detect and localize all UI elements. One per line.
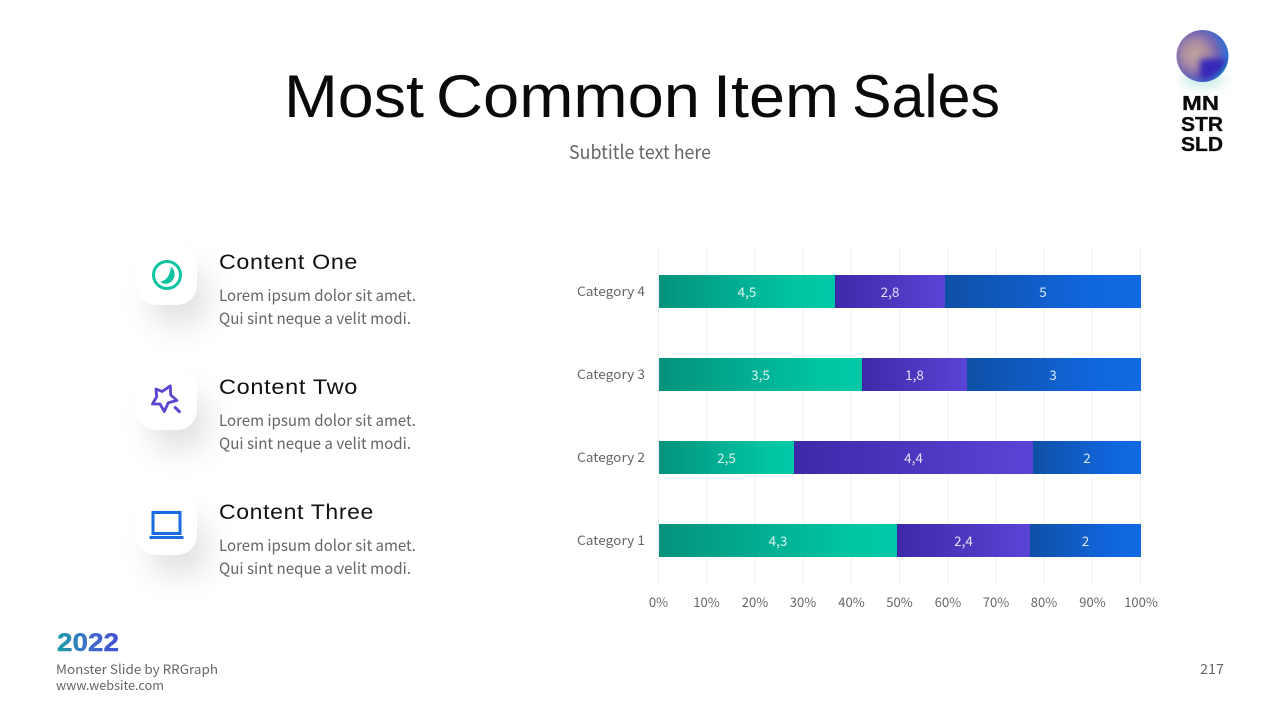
text block: Qui sint neque a velit modi. xyxy=(219,432,411,454)
bar: category 4: 2,8 xyxy=(881,281,899,301)
x axis labels: 80% xyxy=(1031,592,1057,611)
bar: category 1 xyxy=(577,524,1141,557)
bar: category 4: 4,5 xyxy=(738,281,756,301)
logo wordmark: SLD xyxy=(1181,134,1223,156)
page number: 217 xyxy=(1200,659,1224,679)
bar: category 3: 3,5 xyxy=(751,364,770,384)
title: Most xyxy=(284,63,424,130)
bar: category 2: 2,5 xyxy=(717,447,736,467)
panel: content two xyxy=(136,369,416,454)
footer: year: 2022 xyxy=(57,629,119,657)
text block xyxy=(219,409,416,454)
bar: category 2: 2 xyxy=(1083,447,1091,467)
x axis labels: 20% xyxy=(742,592,768,611)
text block: Lorem ipsum dolor sit amet. xyxy=(219,284,416,306)
bar: category 4: 5 xyxy=(1039,281,1047,301)
title xyxy=(284,63,1000,130)
bar: category 3: 1,8 xyxy=(905,364,924,384)
text block: Qui sint neque a velit modi. xyxy=(219,557,411,579)
bar: category 3: Category 3 xyxy=(577,364,645,383)
subtitle: Subtitle text here xyxy=(569,138,711,165)
logo wordmark: STR xyxy=(1181,114,1224,136)
icon: laptop xyxy=(136,494,208,576)
text block: Lorem ipsum dolor sit amet. xyxy=(219,534,416,556)
x axis labels: 70% xyxy=(983,592,1009,611)
x axis labels: 40% xyxy=(838,592,865,611)
bar: category 1: 4,3 xyxy=(769,530,787,550)
bar: category 4: Category 4 xyxy=(577,281,645,300)
x axis labels: 90% xyxy=(1079,592,1106,611)
footer: credits xyxy=(56,659,218,694)
bar: category 1: 2,4 xyxy=(954,530,973,550)
x axis labels: 30% xyxy=(790,592,816,611)
x axis labels xyxy=(649,592,1158,611)
bar: category 3 xyxy=(577,358,1141,391)
bar: category 1: Category 1 xyxy=(577,530,645,549)
text block xyxy=(219,284,416,329)
logo wordmark: MN xyxy=(1182,93,1219,115)
heading: Content One xyxy=(219,251,358,274)
panel: content three xyxy=(136,494,416,579)
bar: category 3: 3 xyxy=(1049,364,1057,384)
x axis labels: 0% xyxy=(649,592,668,611)
icon: logo sphere xyxy=(1176,30,1234,89)
text block: Qui sint neque a velit modi. xyxy=(219,307,411,329)
icon: moon in circle xyxy=(136,244,208,326)
x axis labels: 10% xyxy=(693,592,720,611)
text block xyxy=(219,534,416,579)
bar: category 2: 4,4 xyxy=(904,447,923,467)
title: Common xyxy=(436,63,700,130)
title: Item xyxy=(713,63,839,130)
x axis labels: 50% xyxy=(886,592,913,611)
footer: credits: Monster Slide by RRGraph xyxy=(56,659,218,678)
heading: Content Three xyxy=(219,501,374,524)
x axis labels: 100% xyxy=(1124,592,1158,611)
logo xyxy=(1176,30,1228,152)
panel: content one xyxy=(136,244,416,329)
bar: category 4 xyxy=(577,275,1141,308)
heading: Content Two xyxy=(219,376,358,399)
footer: credits: www.website.com xyxy=(56,675,164,694)
icon: magic wand star xyxy=(136,369,208,451)
bar: category 1: 2 xyxy=(1082,530,1089,550)
x axis labels: 60% xyxy=(935,592,961,611)
text block: Lorem ipsum dolor sit amet. xyxy=(219,409,416,431)
logo wordmark xyxy=(1181,93,1224,156)
stacked bar chart xyxy=(577,248,1158,611)
title: Sales xyxy=(852,63,1000,130)
bar: category 2 xyxy=(577,441,1141,474)
bar: category 2: Category 2 xyxy=(577,447,645,466)
